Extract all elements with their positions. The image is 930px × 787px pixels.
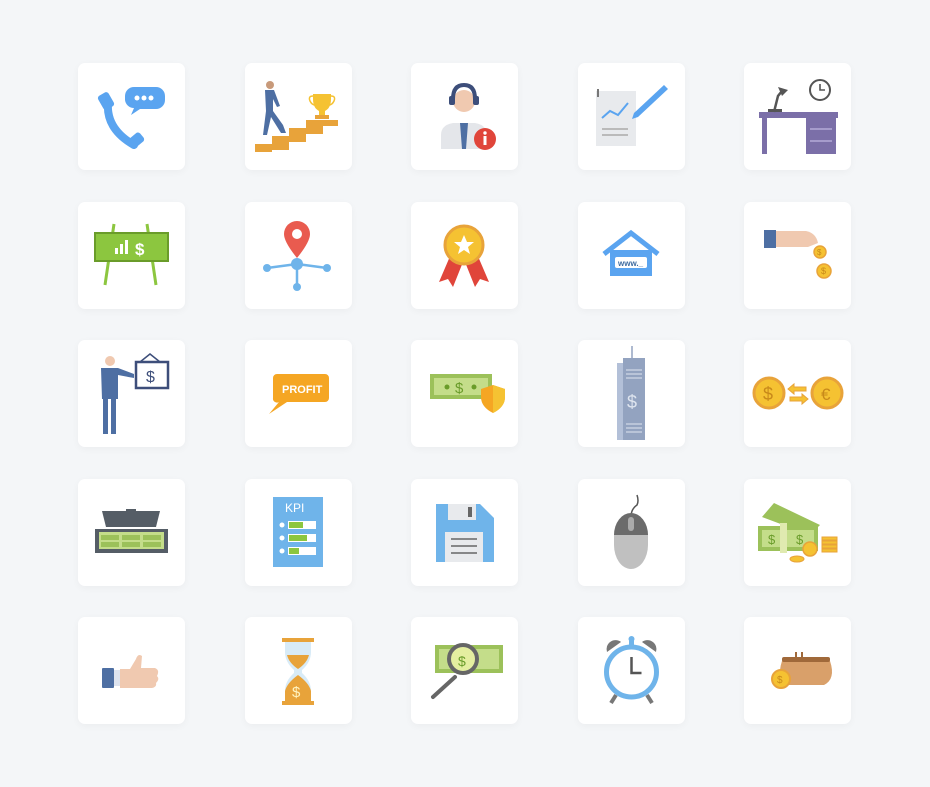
card: money magnifier xyxy=(411,617,518,724)
card: money magnifier: $ xyxy=(458,653,466,669)
card: location network xyxy=(245,202,352,309)
card: money stack xyxy=(744,479,851,586)
card: presenter board: $ xyxy=(146,369,155,386)
card: currency exchange: $ xyxy=(763,384,773,404)
card: money shield: $ xyxy=(455,380,464,397)
card: stairs trophy xyxy=(245,63,352,170)
card: mouse xyxy=(578,479,685,586)
card: house www xyxy=(578,202,685,309)
card: phone chat xyxy=(78,63,185,170)
card: medal xyxy=(411,202,518,309)
card: support agent xyxy=(411,63,518,170)
card: hand coin: $ xyxy=(821,266,826,276)
card: easel chart: $ xyxy=(135,240,145,259)
card: skyscraper xyxy=(578,340,685,447)
card: hourglass: $ xyxy=(292,684,301,701)
card: hand coin: $ xyxy=(817,248,822,257)
card: KPI clipboard xyxy=(245,479,352,586)
card: skyscraper: $ xyxy=(627,392,637,412)
card: profit bubble: PROFIT xyxy=(282,384,323,396)
card: profit bubble xyxy=(245,340,352,447)
card: money stack: $ xyxy=(796,532,804,547)
card: alarm clock xyxy=(578,617,685,724)
card: easel chart xyxy=(78,202,185,309)
card: purse xyxy=(744,617,851,724)
card: KPI clipboard: KPI xyxy=(285,501,304,515)
card: document pen xyxy=(578,63,685,170)
card: desk lamp clock xyxy=(744,63,851,170)
card: floppy disk xyxy=(411,479,518,586)
card: currency exchange: € xyxy=(821,385,831,404)
card: money shield xyxy=(411,340,518,447)
card: money stack: $ xyxy=(768,532,776,547)
card: currency exchange xyxy=(744,340,851,447)
card: money briefcase xyxy=(78,479,185,586)
card: presenter board xyxy=(78,340,185,447)
card: hourglass xyxy=(245,617,352,724)
card: hand coin xyxy=(744,202,851,309)
card: house www: www._ xyxy=(617,259,644,268)
card: thumbs up xyxy=(78,617,185,724)
card: purse: $ xyxy=(777,675,783,686)
